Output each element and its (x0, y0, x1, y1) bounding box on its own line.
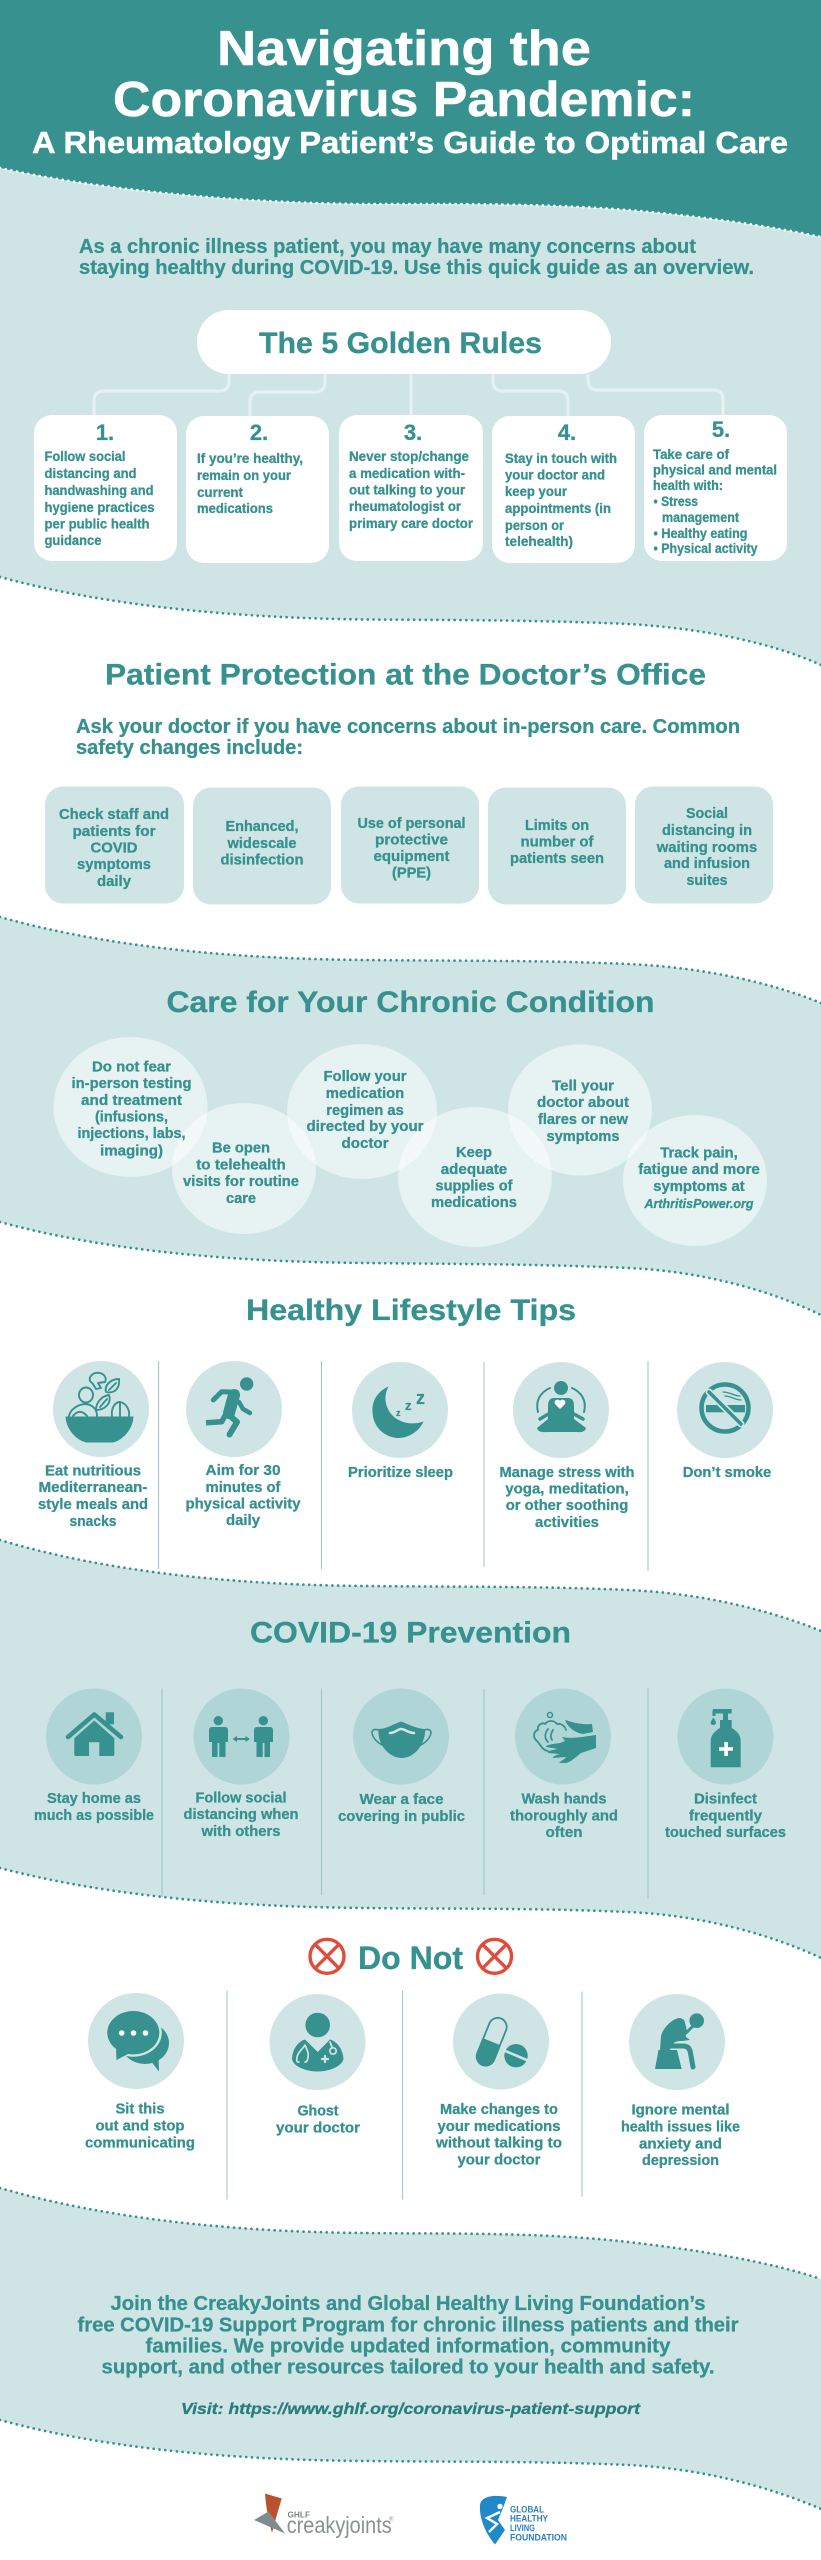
text block: join support program: Join the CreakyJoints and Global Healthy Living Foundation’s (110, 2293, 706, 2315)
icon: red x right (478, 1939, 512, 1973)
text: manage stress: Manage stress with (500, 1464, 634, 1481)
text: follow your medication regimen: doctor (342, 1136, 389, 1152)
panel: PPE: equipment (374, 849, 450, 865)
text: aim for 30 minutes (186, 1462, 301, 1529)
text: follow your medication regimen: directed by your (306, 1119, 424, 1135)
text: disinfect surfaces: frequently (689, 1808, 763, 1824)
text: keep adequate supplies: Keep (456, 1145, 492, 1161)
panel: PPE: (PPE) (392, 866, 431, 882)
text: wash hands: often (546, 1824, 582, 1841)
icon: social distancing people (194, 1688, 290, 1784)
panel: rule 3: primary care doctor (349, 515, 474, 531)
panel: rule 1: distancing and (44, 465, 136, 481)
text: aim for 30 minutes: minutes of (206, 1479, 281, 1496)
panel: rule 5 (644, 415, 787, 561)
panel: rule 3 (339, 415, 483, 561)
logo: creakyjoints: creakyjoints (287, 2512, 392, 2538)
text: eat nutritious: Mediterranean- (38, 1479, 148, 1496)
logo: creakyjoints: ® (389, 2516, 394, 2523)
panel: social distancing: distancing in (662, 823, 752, 839)
header band (0, 0, 821, 300)
logo: global healthy living foundation: GLOBAL (510, 2504, 544, 2516)
text: be open to telehealth: to telehealth (196, 1158, 286, 1174)
text block: ask your doctor: safety changes include: (76, 737, 303, 759)
panel: limits on patients (488, 788, 626, 904)
text: be open to telehealth: visits for routine (183, 1174, 299, 1190)
panel: limits on patients: patients seen (510, 851, 604, 867)
heading: healthy lifestyle tips: Healthy Lifestyle Tips (246, 1294, 576, 1327)
text block: ask your doctor (76, 716, 740, 759)
text: ignore mental health (621, 2102, 740, 2169)
text: track pain: Track pain, (660, 1146, 738, 1162)
panel: rule 5: physical and mental (653, 462, 777, 478)
panel: check staff: symptoms (77, 857, 151, 873)
text: ghost your doctor: your doctor (276, 2120, 360, 2136)
panel: PPE: protective (375, 832, 448, 848)
panel: rule 1: guidance (44, 532, 102, 548)
icon: meditation (513, 1362, 609, 1458)
panel: rule 4: keep your (505, 483, 568, 499)
intro text: As a chronic illness patient, you may have many concerns about (79, 236, 696, 258)
text: stay home (34, 1790, 154, 1824)
panel: rule 4: appointments (in (505, 500, 611, 516)
panel: rule 1: handwashing and (44, 482, 154, 498)
visit link: Visit: https://www.ghlf.org/coronavirus-patient-support (181, 2401, 641, 2418)
white section: footer (0, 2420, 821, 2560)
panel: rule 5: health with: (653, 477, 723, 493)
text: prioritize sleep: Prioritize sleep (348, 1464, 453, 1481)
panel: disinfection: disinfection (220, 852, 304, 868)
panel: rule 5: • Healthy eating (654, 525, 748, 541)
text: be open to telehealth: care (226, 1191, 256, 1207)
pale section: chronic condition (0, 917, 821, 2560)
panel: the 5 golden rules heading: The 5 Golden Rules (259, 327, 542, 360)
text block: join support program: families. We provide updated information, community (146, 2336, 671, 2358)
panel: rule 4: telehealth) (505, 533, 573, 549)
title (32, 22, 788, 160)
text: tell your doctor: Tell your (552, 1078, 614, 1094)
text: manage stress: activities (535, 1514, 599, 1531)
icon: doctor (270, 1994, 366, 2090)
panel: social distancing: suites (686, 873, 728, 889)
panel: rule 1: 1. (96, 420, 114, 445)
panel: rule 1: Follow social (44, 448, 126, 464)
text: do not fear: injections, labs, (78, 1126, 186, 1142)
text: manage stress: or other soothing (506, 1497, 628, 1514)
text: stay home: much as possible (34, 1807, 154, 1824)
text: follow your medication regimen: regimen as (326, 1103, 404, 1119)
panel: rule 5: Take care of (653, 446, 729, 462)
text: aim for 30 minutes: daily (226, 1512, 261, 1529)
text: make changes: your doctor (458, 2152, 541, 2168)
panel: rule 2: current (197, 484, 243, 500)
text: disinfect surfaces: Disinfect (694, 1790, 757, 1808)
text: do not fear: in-person testing (72, 1076, 192, 1092)
panel: rule 4: 4. (558, 420, 576, 445)
logo: global healthy living foundation: HEALTHY (510, 2514, 549, 2524)
text: follow your medication regimen: medication (326, 1086, 404, 1102)
panel: check staff: daily (97, 874, 131, 890)
text: make changes (435, 2102, 562, 2168)
text: ignore mental health: health issues like (621, 2120, 740, 2136)
text: track pain (638, 1146, 760, 1211)
text: stay home: Stay home as (47, 1790, 141, 1807)
text block: join support program: free COVID-19 Support Program for chronic illness patients and their (78, 2314, 739, 2336)
text: ignore mental health: depression (642, 2153, 719, 2169)
icon: sanitizer bottle (678, 1688, 774, 1784)
panel: rule 3: 3. (404, 420, 422, 445)
text: eat nutritious: Eat nutritious (45, 1462, 141, 1480)
text: disinfect surfaces (665, 1790, 786, 1841)
white section: patient protection (0, 577, 821, 2560)
text: manage stress: yoga, meditation, (505, 1480, 629, 1498)
title: Navigating the (217, 22, 591, 76)
panel: disinfection: Enhanced, (226, 819, 298, 835)
text: wear a face covering: covering in public (338, 1808, 465, 1825)
panel: PPE (341, 786, 479, 904)
text: keep adequate supplies (431, 1145, 517, 1211)
text block: join support program: support, and other resources tailored to your health and safety. (102, 2356, 714, 2378)
text: do not fear: and treatment (81, 1093, 182, 1109)
text: follow your medication regimen: Follow your (324, 1069, 407, 1085)
icon: chat bubbles (88, 1993, 184, 2089)
text: tell your doctor: symptoms (546, 1129, 620, 1145)
text: track pain: symptoms at (653, 1179, 745, 1195)
text: sit this out: Sit this (116, 2102, 164, 2118)
icon: house (46, 1688, 142, 1784)
panel: rule 2: remain on your (197, 467, 292, 483)
icon: moon: z (396, 1408, 401, 1418)
text block: join support program (78, 2293, 739, 2378)
heading: chronic condition: Care for Your Chronic Condition (166, 986, 654, 1019)
text: keep adequate supplies: medications (431, 1195, 517, 1211)
panel: rule 2: medications (197, 500, 273, 516)
text: make changes: without talking to (435, 2136, 562, 2152)
text: tell your doctor: doctor about (537, 1095, 629, 1111)
logo: global healthy living foundation (480, 2496, 567, 2544)
text: follow your medication regimen (306, 1069, 424, 1152)
panel: rule 4: Stay in touch with (505, 450, 617, 466)
text: eat nutritious: style meals and (38, 1496, 148, 1513)
text: follow social distancing (184, 1790, 298, 1840)
text: follow social distancing: distancing when (184, 1806, 298, 1823)
text: track pain: ArthritisPower.org (644, 1197, 754, 1211)
icon: runner (186, 1361, 282, 1457)
text: make changes: Make changes to (440, 2102, 558, 2118)
panel: rule 2: 2. (250, 420, 268, 445)
panel: limits on patients: number of (520, 834, 594, 850)
text: wear a face covering: Wear a face (360, 1791, 444, 1808)
panel: rule 4: person or (505, 517, 564, 533)
pale section: prevention (0, 1540, 821, 2560)
heading: covid-19 prevention: COVID-19 Prevention (250, 1616, 571, 1650)
text: do not fear: imaging) (100, 1144, 163, 1160)
text: eat nutritious: snacks (70, 1513, 116, 1530)
panel: rule 3: Never stop/change (349, 448, 469, 464)
icon: capsule and tablet (453, 1994, 549, 2090)
text: follow social distancing: Follow social (196, 1790, 286, 1806)
icon: washing hands (515, 1688, 611, 1784)
text: manage stress (500, 1464, 634, 1531)
panel: rule 4: your doctor and (505, 466, 605, 482)
text: disinfect surfaces: touched surfaces (665, 1824, 786, 1841)
text: tell your doctor (537, 1078, 629, 1145)
panel: rule 3: rheumatologist or (349, 498, 462, 514)
text: do not fear (72, 1060, 192, 1160)
panel: disinfection (193, 788, 331, 904)
text: be open to telehealth: Be open (212, 1140, 270, 1156)
text: wash hands: Wash hands (522, 1790, 606, 1808)
panel: check staff: COVID (90, 840, 138, 856)
panel: rule 1 (34, 415, 177, 561)
panel: social distancing: Social (686, 806, 728, 822)
text: ignore mental health: anxiety and (639, 2136, 722, 2152)
intro text (79, 236, 754, 279)
text: be open to telehealth (183, 1140, 299, 1207)
pale section: support program (0, 2188, 821, 2560)
icon: salad bowl (53, 1361, 149, 1457)
panel: PPE: Use of personal (358, 816, 466, 832)
text: track pain: fatigue and more (638, 1162, 760, 1178)
panel: rule 2 (186, 416, 329, 563)
text: do not fear: (infusions, (95, 1110, 168, 1126)
logo: creakyjoints (254, 2494, 394, 2538)
white section: do not (0, 1868, 821, 2560)
text block: ask your doctor: Ask your doctor if you have concerns about in-person care. Common (76, 716, 740, 738)
text: ignore mental health: Ignore mental (632, 2102, 730, 2118)
bubble group: chronic condition tips (54, 1037, 767, 1247)
panel: rule 5: management (662, 509, 739, 525)
logo: global healthy living foundation: FOUNDATION (510, 2532, 567, 2544)
heading: patient protection: Patient Protection at the Doctor’s Office (105, 658, 706, 692)
panel: rule 2: If you’re healthy, (197, 450, 303, 466)
panel: check staff: Check staff and (59, 807, 169, 823)
panel: social distancing (635, 786, 773, 904)
text: wear a face covering (338, 1791, 465, 1825)
title: A Rheumatology Patient’s Guide to Optimal Care (32, 125, 788, 160)
panel: rule 5: • Stress (654, 493, 698, 509)
text: sit this out: out and stop (96, 2118, 185, 2134)
intro text: staying healthy during COVID-19. Use this quick guide as an overview. (79, 257, 754, 279)
text: sit this out (85, 2102, 195, 2152)
icon: no smoking (677, 1362, 773, 1458)
panel: check staff (45, 786, 184, 904)
panel: disinfection: widescale (226, 836, 296, 852)
text: aim for 30 minutes: Aim for 30 (206, 1462, 280, 1479)
panel: rule 3: out talking to your (349, 482, 466, 498)
text: eat nutritious (38, 1462, 148, 1530)
panel: rule 5: • Physical activity (654, 540, 758, 556)
icon: moon: z (416, 1388, 425, 1408)
text: sit this out: communicating (85, 2136, 195, 2152)
logo: creakyjoints: GHLF (288, 2510, 310, 2520)
icon: red x left (310, 1939, 344, 1973)
panel: check staff: patients for (72, 824, 156, 840)
icon: moon: z (405, 1398, 412, 1413)
text: aim for 30 minutes: physical activity (186, 1496, 301, 1512)
icon: moon (352, 1362, 448, 1458)
text: ghost your doctor: Ghost (298, 2104, 339, 2120)
panel: rule 3: a medication with- (349, 465, 465, 481)
white section: lifestyle tips (0, 1222, 821, 2560)
text: follow social distancing: with others (201, 1823, 280, 1840)
text: ghost your doctor (276, 2104, 360, 2136)
text: keep adequate supplies: supplies of (436, 1178, 513, 1194)
icon: face mask (353, 1688, 449, 1784)
panel: rule 5: 5. (712, 417, 730, 442)
panel: rule 4 (492, 416, 635, 563)
text: tell your doctor: flares or new (538, 1112, 629, 1128)
text: do not fear: Do not fear (92, 1060, 171, 1076)
panel: social distancing: waiting rooms (656, 840, 757, 856)
connector lines (94, 374, 723, 416)
heading: do not: Do Not (358, 1940, 463, 1976)
panel: social distancing: and infusion (664, 856, 750, 872)
title: Coronavirus Pandemic: (113, 73, 695, 127)
panel: rule 1: hygiene practices (44, 499, 155, 515)
text: make changes: your medications (438, 2119, 560, 2135)
icon: person with head in hands (629, 1994, 725, 2090)
panel: the 5 golden rules heading (197, 310, 611, 374)
logo: global healthy living foundation: LIVING (510, 2523, 535, 2534)
text: don't smoke: Don’t smoke (683, 1464, 771, 1481)
text: keep adequate supplies: adequate (441, 1162, 507, 1178)
text: wash hands (510, 1790, 618, 1841)
text: wash hands: thoroughly and (510, 1808, 618, 1824)
panel: limits on patients: Limits on (525, 818, 589, 834)
panel: rule 1: per public health (44, 516, 150, 532)
